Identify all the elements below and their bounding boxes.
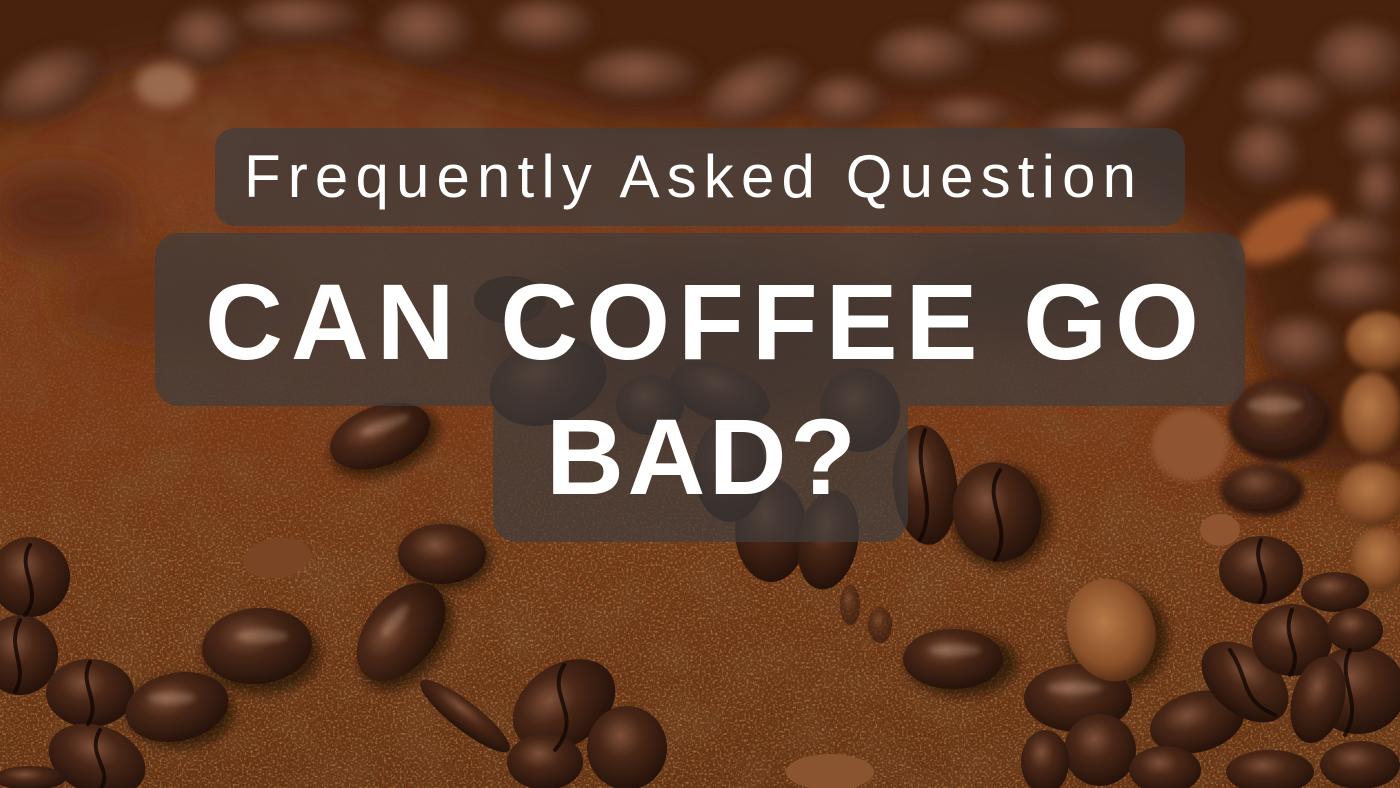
panel: title band bbox=[155, 233, 1245, 542]
subtitle text: Frequently Asked Question bbox=[244, 143, 1136, 210]
beans seen through the central panels bbox=[474, 240, 1160, 522]
bean creases bbox=[15, 430, 1352, 788]
bean highlights bbox=[148, 397, 1303, 704]
sharp foreground beans bbox=[0, 390, 1400, 788]
soft dark masses behind the blurred beans bbox=[0, 0, 1400, 470]
panel: subtitle band bbox=[215, 128, 1185, 226]
right side beans bbox=[1152, 312, 1400, 592]
blurred beans along the top bbox=[0, 0, 1400, 373]
title line 2: BAD? bbox=[546, 396, 856, 517]
title line 1: CAN COFFEE GO bbox=[205, 261, 1199, 382]
